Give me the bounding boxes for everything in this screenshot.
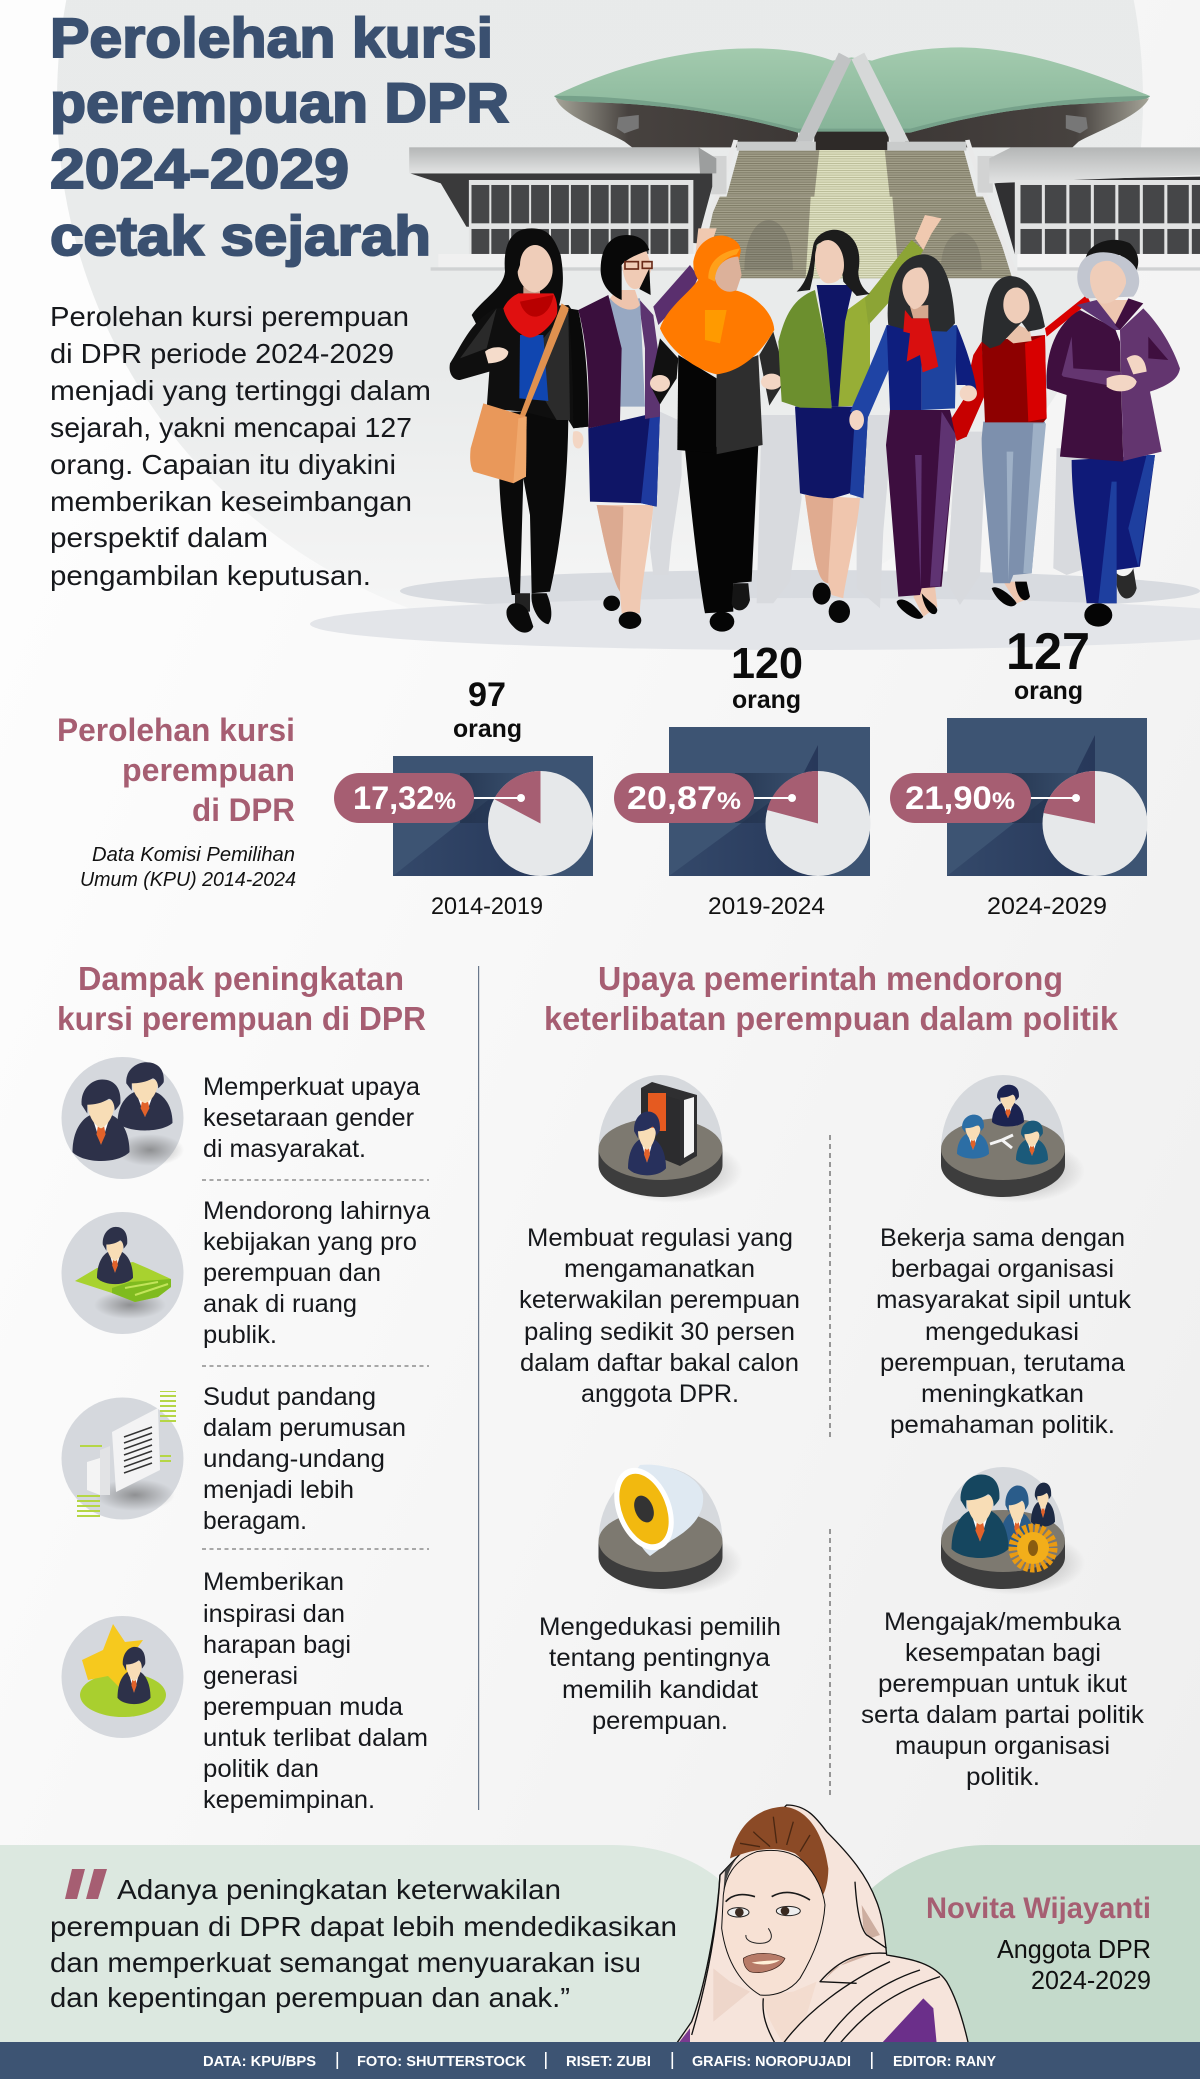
quote mark	[65, 1869, 107, 1899]
impact text 4: perempuan muda	[203, 1693, 403, 1721]
icon: speaker	[598, 1459, 742, 1595]
impact text 1: di masyarakat.	[203, 1135, 366, 1163]
text: membuat regulasi: keterwakilan perempuan	[519, 1286, 800, 1314]
impact text 3: dalam perumusan	[203, 1414, 406, 1442]
text: bekerja sama: berbagai organisasi	[891, 1255, 1114, 1283]
impact text 1: kesetaraan gender	[203, 1104, 414, 1132]
bar 2014-2019: 97 orang, 17,32%: 17,32%	[353, 780, 456, 816]
heading: Dampak peningkatan kursi perempuan di DPR: Dampak peningkatan	[78, 960, 404, 997]
text: mengedukasi pemilih: tentang pentingnya	[549, 1644, 770, 1672]
impact text 1: Memperkuat upaya	[203, 1073, 420, 1101]
figure: woman with black coat, red scarf and shoulder bag	[450, 228, 588, 633]
text: bekerja sama: Bekerja sama dengan	[880, 1224, 1125, 1252]
heading: Dampak peningkatan kursi perempuan di DPR: kursi perempuan di DPR	[57, 1000, 426, 1037]
quote text: dan kepentingan perempuan dan anak.”	[50, 1982, 570, 2013]
impact text 3: undang-undang	[203, 1445, 385, 1473]
text: bekerja sama: pemahaman politik.	[890, 1411, 1115, 1439]
bar 2019-2024: 120 orang, 20,87%: 120	[731, 639, 803, 688]
figure: older woman with purple coat and navy pants	[1046, 240, 1180, 627]
text: bekerja sama: meningkatkan	[921, 1380, 1084, 1408]
impact text 2: perempuan dan	[203, 1259, 381, 1287]
bar 2019-2024: 120 orang, 20,87%	[614, 639, 870, 920]
footer credits bar: GRAFIS: NOROPUJADI	[692, 2053, 851, 2070]
text: membuat regulasi: anggota DPR.	[581, 1380, 739, 1408]
quote text: Adanya peningkatan keterwakilan	[117, 1874, 561, 1905]
figure: woman with green jacket raising her arm	[778, 215, 942, 623]
impact text 4: inspirasi dan	[203, 1600, 345, 1628]
floor shadow ellipses	[310, 570, 1200, 650]
intro paragraph: orang. Capaian itu diyakini	[50, 449, 396, 480]
text: membuat regulasi: dalam daftar bakal calon	[520, 1349, 799, 1377]
text: bekerja sama: mengedukasi	[925, 1318, 1079, 1346]
chart heading: Perolehan kursi perempuan di DPR: di DPR	[192, 792, 295, 828]
text: membuat regulasi	[519, 1224, 800, 1408]
title: 2024-2029	[50, 137, 349, 200]
intro paragraph: perspektif dalam	[50, 522, 268, 553]
quote panels	[0, 1845, 1200, 2042]
text: mengedukasi pemilih: Mengedukasi pemilih	[539, 1613, 781, 1641]
title: Perolehan kursi	[50, 6, 493, 69]
figure: woman with glasses, purple jacket and blue skirt	[568, 228, 717, 629]
text: mengajak/membuka: serta dalam partai politik	[861, 1701, 1145, 1729]
quote text	[50, 1874, 677, 2013]
heading: Upaya pemerintah mendorong keterlibatan perempuan dalam politik	[544, 960, 1119, 1037]
impact text 3: menjadi lebih	[203, 1476, 354, 1504]
impact text 4: untuk terlibat dalam	[203, 1724, 428, 1752]
chart heading: Perolehan kursi perempuan di DPR: Perolehan kursi	[57, 712, 295, 748]
footer credits bar: EDITOR: RANY	[893, 2053, 996, 2070]
chart heading: Perolehan kursi perempuan di DPR: perempuan	[122, 752, 295, 788]
icon: people with gear	[941, 1467, 1085, 1595]
text: mengedukasi pemilih: perempuan.	[592, 1707, 728, 1735]
impact text 1	[203, 1073, 420, 1163]
heading: Dampak peningkatan kursi perempuan di DPR	[57, 960, 426, 1037]
intro paragraph: Perolehan kursi perempuan	[50, 301, 409, 332]
impact text 4: Memberikan	[203, 1568, 344, 1596]
footer credits bar: FOTO: SHUTTERSTOCK	[357, 2053, 526, 2070]
footer credits bar	[0, 2042, 1200, 2079]
chart source note: Data Komisi Pemilihan	[92, 844, 295, 866]
portrait: Novita Wijayanti	[677, 1805, 968, 2043]
icon: law document	[62, 1391, 184, 1520]
text: mengajak/membuka: maupun organisasi	[895, 1732, 1110, 1760]
text: membuat regulasi: paling sedikit 30 persen	[524, 1318, 795, 1346]
intro paragraph: menjadi yang tertinggi dalam	[50, 375, 431, 406]
text: mengajak/membuka: politik.	[966, 1763, 1040, 1791]
chart heading: Perolehan kursi perempuan di DPR	[57, 712, 295, 828]
text: mengajak/membuka: kesempatan bagi	[905, 1639, 1101, 1667]
bar 2024-2029: 127 orang, 21,90%: orang	[1014, 677, 1083, 705]
intro paragraph	[50, 301, 431, 591]
chart source note: Umum (KPU) 2014-2024	[80, 869, 296, 891]
figure: woman with blue top, red scarf and purple pants	[849, 254, 977, 619]
intro paragraph: memberikan keseimbangan	[50, 486, 412, 517]
text: mengajak/membuka	[861, 1608, 1145, 1791]
intro paragraph: di DPR periode 2024-2029	[50, 338, 394, 369]
bar 2014-2019: 97 orang, 17,32%	[334, 676, 593, 920]
impact text 4: harapan bagi	[203, 1631, 351, 1659]
text: mengedukasi pemilih	[539, 1613, 781, 1735]
intro paragraph: sejarah, yakni mencapai 127	[50, 412, 412, 443]
bar 2019-2024: 120 orang, 20,87%: 2019-2024	[708, 893, 825, 920]
text: mengajak/membuka: perempuan untuk ikut	[878, 1670, 1127, 1698]
column divider	[478, 966, 479, 1810]
icon: person with green stack	[62, 1212, 184, 1334]
icon: person with book	[598, 1075, 742, 1203]
speaker name and role: Anggota DPR	[997, 1934, 1151, 1964]
impact text 2: publik.	[203, 1321, 277, 1349]
quote text: dan memperkuat semangat menyuarakan isu	[50, 1947, 641, 1978]
bar 2019-2024: 120 orang, 20,87%: 20,87 %	[627, 780, 741, 816]
icon: two people	[62, 1057, 184, 1179]
text: membuat regulasi: mengamanatkan	[564, 1255, 755, 1283]
speaker name and role	[926, 1892, 1151, 1995]
bar 2024-2029: 127 orang, 21,90%: 21,90 %	[905, 780, 1015, 816]
text: bekerja sama: perempuan, terutama	[880, 1349, 1125, 1377]
icon: three people meeting	[941, 1075, 1085, 1203]
bar 2014-2019: 97 orang, 17,32%: 97	[468, 676, 506, 714]
impact text 2: Mendorong lahirnya	[203, 1197, 430, 1225]
bar 2014-2019: 97 orang, 17,32%: orang	[453, 715, 522, 743]
heading: Upaya pemerintah mendorong keterlibatan perempuan dalam politik: Upaya pemerintah mendorong	[598, 960, 1063, 997]
footer credits bar: DATA: KPU/BPS	[203, 2053, 316, 2070]
impact text 2: anak di ruang	[203, 1290, 357, 1318]
text: mengajak/membuka: Mengajak/membuka	[884, 1608, 1121, 1636]
figure: woman with red sweater and grey pants	[952, 276, 1090, 606]
quote text: perempuan di DPR dapat lebih mendedikasikan	[50, 1911, 677, 1942]
text: membuat regulasi: Membuat regulasi yang	[527, 1224, 793, 1252]
impact text 2: kebijakan yang pro	[203, 1228, 417, 1256]
footer credits bar: RISET: ZUBI	[566, 2053, 651, 2070]
impact text 4: politik dan	[203, 1755, 319, 1783]
bar 2014-2019: 97 orang, 17,32%: 2014-2019	[431, 893, 543, 920]
title: cetak sejarah	[50, 204, 431, 267]
speaker name and role: 2024-2029	[1031, 1965, 1151, 1995]
figure shadows on the ground	[650, 412, 1090, 608]
impact text 4: kepemimpinan.	[203, 1786, 375, 1814]
bar 2024-2029: 127 orang, 21,90%	[890, 623, 1148, 920]
impact text 3: Sudut pandang	[203, 1383, 376, 1411]
text: bekerja sama: masyarakat sipil untuk	[876, 1286, 1132, 1314]
bar 2019-2024: 120 orang, 20,87%: orang	[732, 686, 801, 714]
title	[50, 6, 509, 267]
figure: woman with orange hijab	[650, 236, 787, 632]
title: perempuan DPR	[50, 71, 509, 134]
intro paragraph: pengambilan keputusan.	[50, 560, 371, 591]
icon: star and person	[62, 1616, 184, 1738]
chart source note	[80, 844, 296, 891]
illustration: DPR building	[409, 47, 1200, 278]
impact text 3: beragam.	[203, 1507, 307, 1535]
impact text 4: generasi	[203, 1662, 298, 1690]
impact text 4	[203, 1568, 428, 1814]
bar 2024-2029: 127 orang, 21,90%: 127	[1006, 623, 1090, 681]
impact text 3	[203, 1383, 406, 1535]
text: bekerja sama	[876, 1224, 1132, 1439]
bar 2024-2029: 127 orang, 21,90%: 2024-2029	[987, 893, 1107, 920]
text: mengedukasi pemilih: memilih kandidat	[562, 1676, 758, 1704]
speaker name and role: Novita Wijayanti	[926, 1892, 1151, 1925]
impact text 2	[203, 1197, 430, 1349]
heading: Upaya pemerintah mendorong keterlibatan perempuan dalam politik: keterlibatan perempuan dalam politik	[544, 1000, 1119, 1037]
